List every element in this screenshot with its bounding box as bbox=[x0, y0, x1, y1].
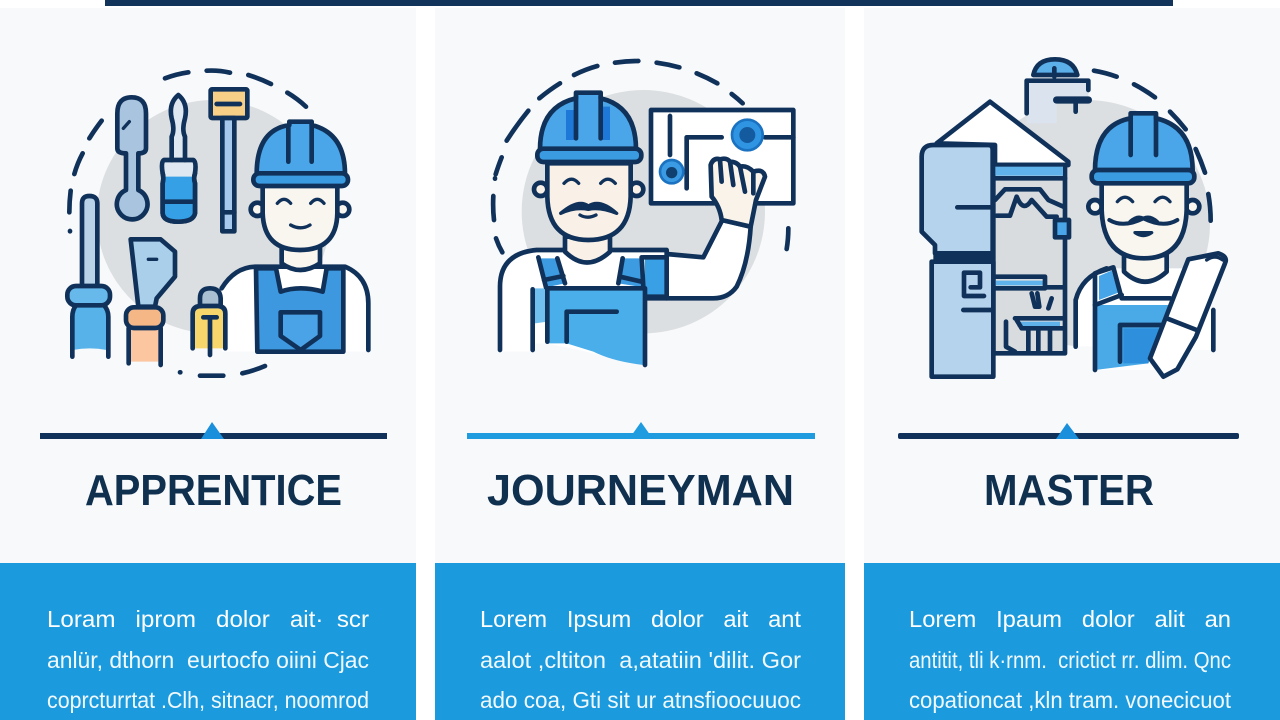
tool: small screwdriver bbox=[162, 95, 196, 222]
house roof bbox=[937, 102, 1068, 165]
head and ears bbox=[251, 203, 264, 216]
dashed ring bbox=[493, 61, 788, 252]
heading: journeyman: JOURNEYMAN bbox=[487, 466, 794, 515]
small helmet bracket bbox=[1027, 59, 1088, 123]
worker: apprentice bbox=[222, 122, 368, 352]
divider: journeyman bbox=[467, 422, 815, 439]
text block: apprentice bbox=[0, 563, 416, 720]
top rule bbox=[105, 0, 1173, 6]
hand bbox=[711, 159, 765, 227]
tool: T-handle driver bbox=[211, 89, 247, 231]
grey circle backdrop bbox=[963, 100, 1210, 347]
pipes bbox=[995, 189, 1063, 217]
worker: journeyman bbox=[500, 93, 667, 365]
overalls bbox=[256, 268, 343, 352]
text block: apprentice: anlür, dthorn eurtocfo oiini Cjac bbox=[47, 647, 369, 673]
panel background bbox=[864, 8, 1280, 563]
tool: yellow tester bbox=[193, 288, 225, 355]
text block: master bbox=[864, 563, 1280, 720]
panel: journeyman bbox=[435, 8, 845, 720]
blueprint roll bbox=[1150, 253, 1226, 377]
tool: scraper bbox=[126, 239, 175, 365]
overalls bbox=[645, 257, 667, 297]
tool: spoon wrench bbox=[117, 97, 147, 219]
head and ears bbox=[1088, 200, 1102, 213]
face bbox=[1117, 197, 1170, 235]
cabinet interior bbox=[993, 165, 1069, 353]
body bbox=[1076, 268, 1213, 370]
grey circle backdrop bbox=[522, 90, 765, 333]
text block: apprentice: coprcturrtat .Clh, sitnacr, noomrod bbox=[47, 687, 369, 713]
text block: journeyman: aalot ,cltiton a,atatiin 'dilit. Gor bbox=[480, 647, 801, 673]
grey circle backdrop bbox=[97, 100, 330, 333]
helmet bbox=[1095, 113, 1193, 171]
face bbox=[277, 199, 324, 228]
panel: master bbox=[864, 8, 1280, 720]
dashed ring bbox=[69, 71, 306, 376]
helmet bbox=[257, 122, 345, 174]
panel background bbox=[0, 8, 416, 563]
text block: master: Lorem Ipaum dolor alit an bbox=[909, 606, 1231, 632]
text block: journeyman: ado coa, Gti sit ur atnsfioocuuoc bbox=[480, 687, 801, 713]
panel: apprentice bbox=[0, 8, 416, 720]
panel background bbox=[435, 8, 845, 563]
dashed ring bbox=[1094, 71, 1211, 221]
faucet bbox=[995, 281, 1044, 285]
text block: apprentice: Loram iprom dolor ait· scr bbox=[47, 606, 369, 632]
helmet bbox=[540, 93, 636, 149]
table bbox=[1017, 322, 1060, 327]
tool: large screwdriver bbox=[67, 196, 110, 357]
worker: master bbox=[1076, 113, 1226, 377]
icon: master with plumbing cabinet bbox=[922, 59, 1226, 377]
text block: journeyman: Lorem Ipsum dolor ait ant bbox=[480, 606, 802, 632]
head and ears bbox=[534, 183, 547, 196]
heading: apprentice: APPRENTICE bbox=[85, 466, 342, 515]
face bbox=[564, 179, 615, 217]
body bbox=[222, 267, 368, 352]
pocket bbox=[281, 312, 320, 350]
text block: master: copationcat ,kln tram. vonecicuot bbox=[909, 687, 1232, 713]
cabinet left bbox=[922, 145, 993, 377]
text block: master: antitit, tli k·rnm. crictict rr. dlim. Qnc bbox=[909, 647, 1231, 673]
raised arm bbox=[667, 220, 751, 298]
icon: apprentice with tools bbox=[67, 71, 368, 376]
icon: journeyman at control board bbox=[493, 61, 793, 365]
control board bbox=[651, 110, 793, 203]
heading: master: MASTER bbox=[984, 466, 1154, 515]
body bbox=[500, 250, 667, 365]
divider: apprentice bbox=[40, 422, 387, 439]
text block: journeyman bbox=[435, 563, 845, 720]
divider: master bbox=[898, 423, 1239, 439]
overalls bbox=[1095, 305, 1170, 370]
